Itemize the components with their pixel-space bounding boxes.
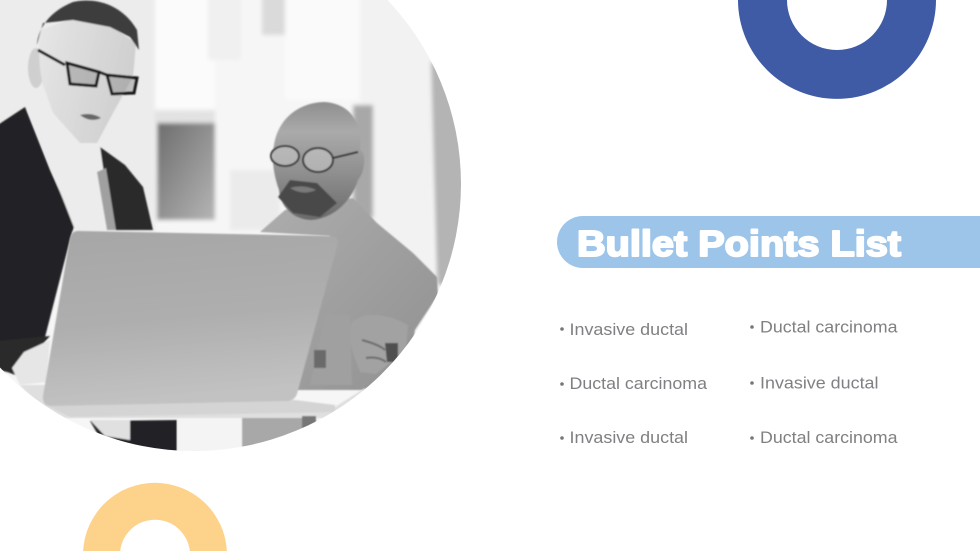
item: Ductal carcinoma xyxy=(760,318,898,336)
glasses xyxy=(271,146,358,172)
jacket xyxy=(0,107,75,375)
pocket logo xyxy=(314,350,326,368)
head xyxy=(273,102,364,220)
hair xyxy=(37,0,139,50)
heading text: Bullet Points List xyxy=(577,223,901,264)
shirt xyxy=(27,110,104,230)
decorative blue ring xyxy=(738,0,936,99)
bullet list: left column xyxy=(560,321,708,447)
photo: two men looking at a laptop xyxy=(0,0,480,458)
banner shape xyxy=(557,216,980,268)
item: Ductal carcinoma xyxy=(570,375,708,393)
beard xyxy=(278,180,337,217)
mouth xyxy=(80,114,101,120)
item: Invasive ductal xyxy=(760,374,878,392)
heading banner xyxy=(557,216,980,268)
man on the right xyxy=(260,102,438,390)
shirt xyxy=(260,198,438,390)
item: Invasive ductal xyxy=(570,429,688,447)
hand xyxy=(356,318,407,373)
man on the left xyxy=(0,0,177,455)
face xyxy=(39,18,136,143)
glasses xyxy=(38,50,137,94)
table xyxy=(21,384,366,450)
item: Ductal carcinoma xyxy=(760,429,898,447)
laptop xyxy=(43,231,338,417)
decorative yellow ring xyxy=(83,483,227,551)
arm and hand xyxy=(0,336,50,375)
photo background: office wall xyxy=(0,0,480,450)
lower jacket xyxy=(90,420,177,455)
item: Invasive ductal xyxy=(570,321,688,339)
bullet list: right column xyxy=(750,318,898,447)
ear xyxy=(28,48,44,88)
